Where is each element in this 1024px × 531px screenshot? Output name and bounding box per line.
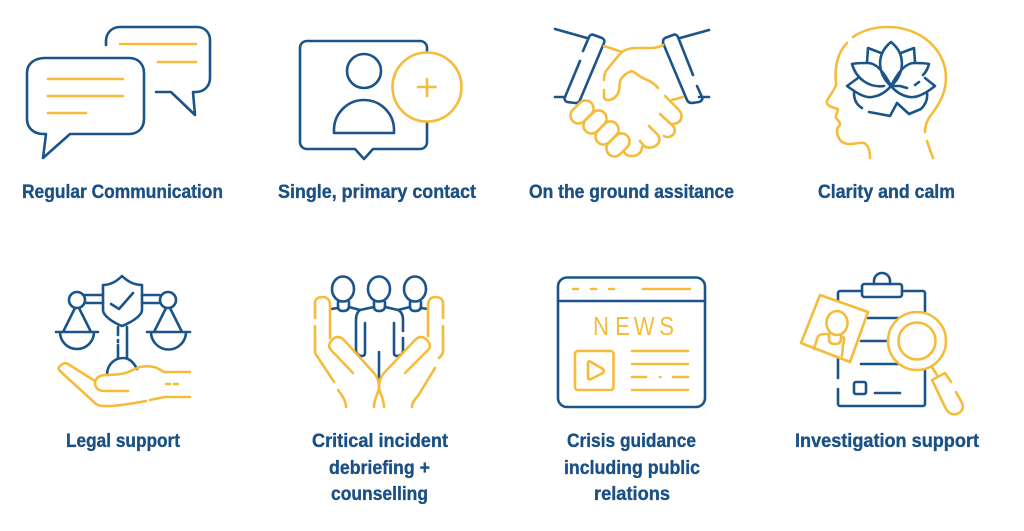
label: Crisis guidance <box>567 431 696 452</box>
icon: handshake <box>555 29 709 160</box>
panel: regular communication <box>22 27 223 203</box>
panel: legal support <box>56 276 190 452</box>
icon: people held in hands <box>315 276 443 407</box>
icon: head with lotus <box>827 27 946 158</box>
label: Critical incident <box>312 431 449 452</box>
label: debriefing + <box>329 458 430 479</box>
icon: news web page <box>558 278 705 407</box>
label: On the ground assitance <box>529 182 734 203</box>
icon: contact card with plus <box>300 41 462 159</box>
label <box>564 431 700 505</box>
label <box>312 431 449 505</box>
label: Investigation support <box>795 431 980 452</box>
icon: news web page: NEWS <box>593 312 674 341</box>
icon: clipboard with photo and magnifier <box>801 273 963 414</box>
label: Regular Communication <box>22 182 223 203</box>
panel: investigation support <box>795 273 980 452</box>
label: Clarity and calm <box>818 182 955 203</box>
label: counselling <box>331 484 428 505</box>
label: relations <box>594 484 670 505</box>
panel: critical incident debriefing and counselling <box>312 276 449 505</box>
panel: on the ground assistance <box>529 29 734 203</box>
label: including public <box>564 458 700 479</box>
panel: single primary contact <box>278 41 477 203</box>
icon: scales on a hand <box>56 276 190 406</box>
panel: clarity and calm <box>818 27 955 203</box>
icon: speech bubbles <box>27 27 210 158</box>
label: Legal support <box>66 431 181 452</box>
panel: crisis guidance <box>558 278 705 505</box>
label: Single, primary contact <box>278 182 477 203</box>
